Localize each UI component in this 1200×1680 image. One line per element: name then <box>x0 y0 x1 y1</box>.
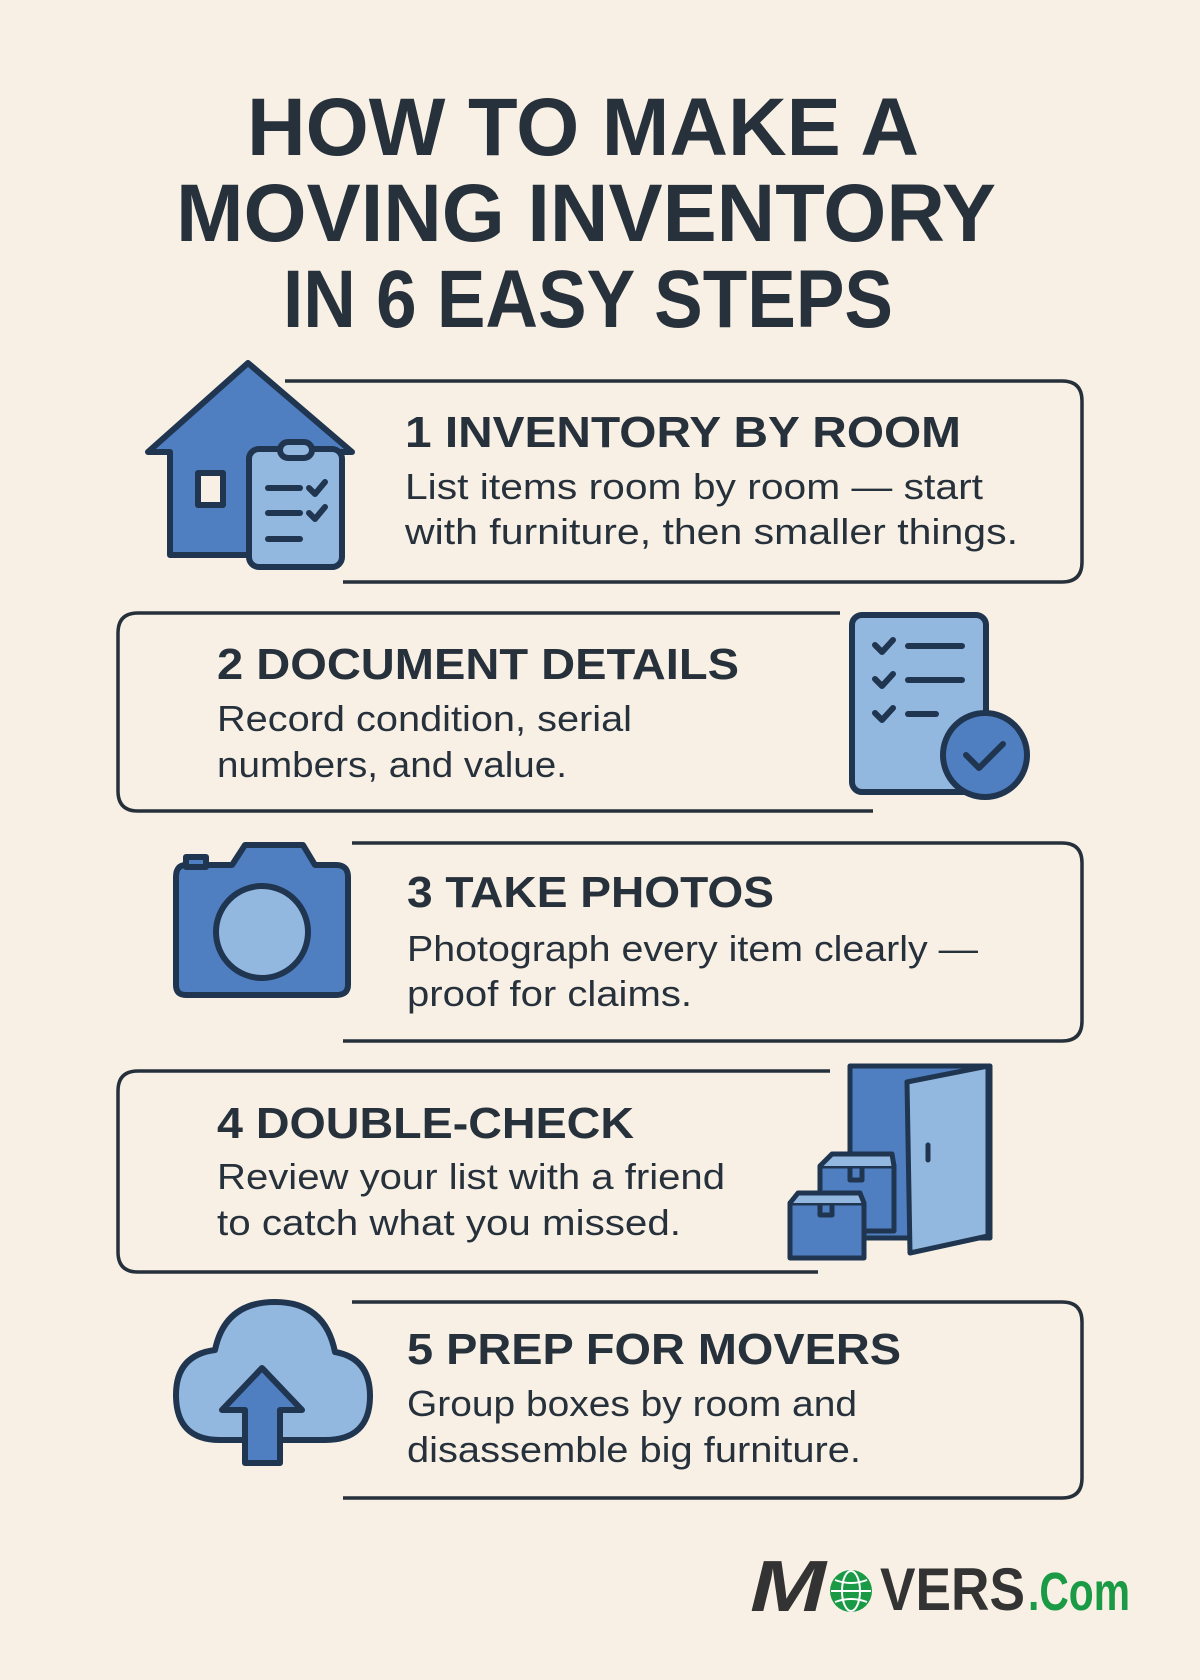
panel: step 3 <box>176 843 1082 1041</box>
step 5 text <box>407 1383 861 1470</box>
step 2 text: Record condition, serial <box>217 698 632 739</box>
step 4 heading: 4 DOUBLE-CHECK <box>217 1099 634 1148</box>
title <box>176 82 996 345</box>
panel: step 1 <box>148 363 1082 582</box>
icon: house with clipboard <box>148 363 352 567</box>
logo: M <box>750 1547 829 1627</box>
icon: cloud upload <box>176 1302 370 1463</box>
icon: checklist with check badge <box>852 615 1027 797</box>
title: HOW TO MAKE A <box>247 82 919 173</box>
step 2 text <box>217 698 632 785</box>
title: IN 6 EASY STEPS <box>283 254 893 345</box>
step 2 text: numbers, and value. <box>217 744 567 785</box>
panel: step 2 <box>118 613 1027 811</box>
logo <box>750 1547 1130 1627</box>
step 4 text <box>217 1156 725 1243</box>
icon: door and boxes <box>790 1066 990 1258</box>
step 4 text: to catch what you missed. <box>217 1202 681 1243</box>
panel: step 4 <box>118 1066 990 1272</box>
logo: VERS <box>880 1556 1025 1623</box>
panel: step 5 <box>176 1302 1082 1498</box>
icon: globe <box>830 1570 872 1612</box>
icon: camera <box>176 845 348 995</box>
step 5 text: Group boxes by room and <box>407 1383 857 1424</box>
step 3 heading: 3 TAKE PHOTOS <box>407 868 774 917</box>
step 2 heading: 2 DOCUMENT DETAILS <box>217 640 739 689</box>
step 1 text: with furniture, then smaller things. <box>404 511 1018 552</box>
title: MOVING INVENTORY <box>176 168 996 259</box>
step 1 text: List items room by room — start <box>405 466 983 507</box>
step 1 heading: 1 INVENTORY BY ROOM <box>405 408 961 457</box>
step 3 text: proof for claims. <box>407 973 692 1014</box>
step 3 text: Photograph every item clearly — <box>407 928 978 969</box>
step 4 text: Review your list with a friend <box>217 1156 725 1197</box>
step 5 heading: 5 PREP FOR MOVERS <box>407 1325 901 1374</box>
step 1 text <box>404 466 1018 552</box>
logo: .Com <box>1028 1562 1130 1622</box>
step 3 text <box>407 928 978 1014</box>
step 5 text: disassemble big furniture. <box>407 1429 861 1470</box>
